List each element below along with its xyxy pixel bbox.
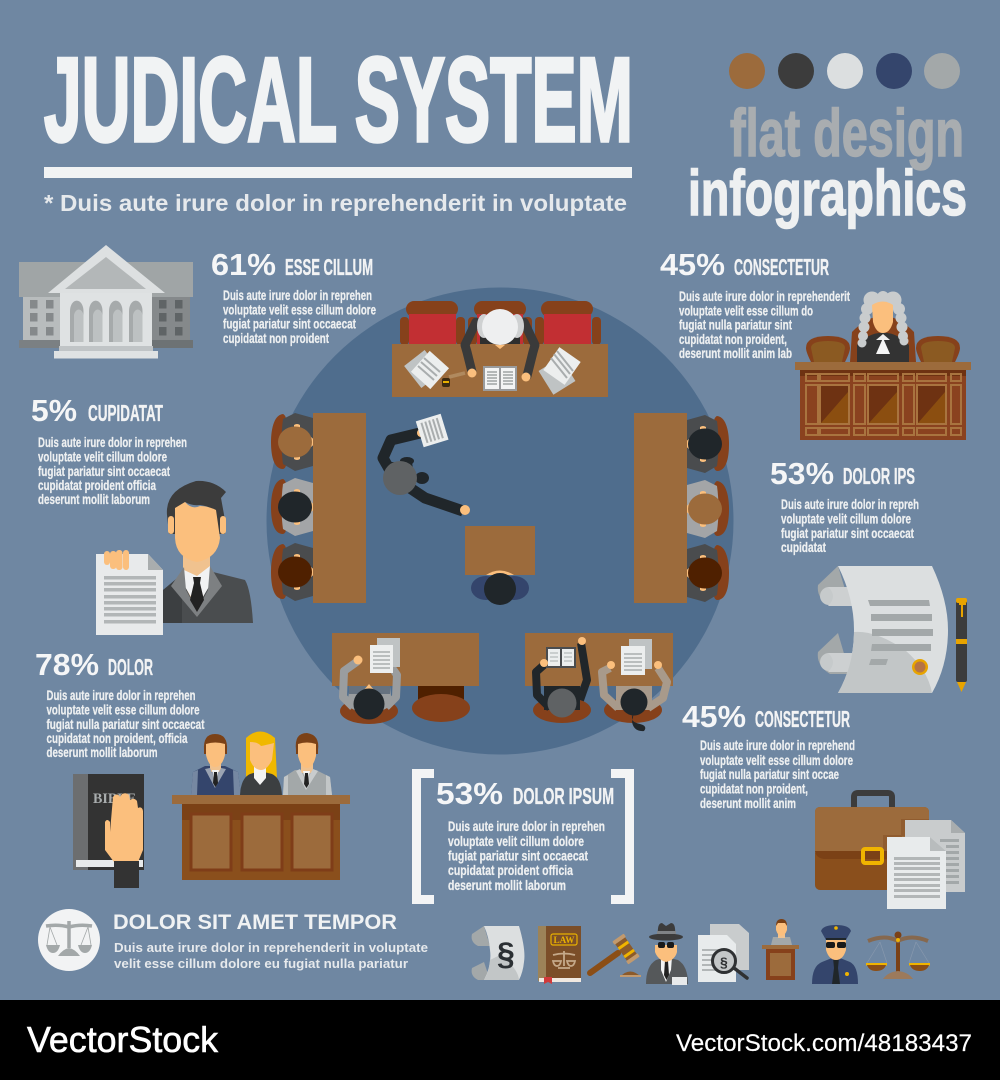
- icon: gavel: [442, 373, 465, 387]
- text block: 61% esse cillum: Duis aute irure dolor in reprehen: [223, 288, 372, 303]
- callout bracket: 53% dolor ipsum: DOLOR IPSUM: [513, 783, 614, 809]
- text block: 78% dolor: voluptate velit esse cillum dolore: [46, 702, 200, 718]
- text block: 61% esse cillum: cupidatat non proident: [223, 331, 329, 346]
- bottom right table with two clerks: [525, 633, 673, 731]
- text block: 53% dolor ips: DOLOR IPS: [843, 463, 915, 489]
- icon: scroll and pen: [818, 566, 967, 693]
- text block: 5% cupidatat: voluptate velit cillum dolore: [38, 449, 167, 464]
- icon: brass scales: [866, 932, 930, 979]
- icon: courthouse: [19, 245, 193, 358]
- text block: 78% dolor: [35, 647, 205, 760]
- text block: 5% cupidatat: deserunt mollit laborum: [38, 492, 150, 507]
- watermark bar: VectorStock: [27, 1019, 219, 1060]
- text block: 45% consectetur lower: 45%: [682, 699, 746, 734]
- text block: 45% consectetur: Duis aute irure dolor in reprehenderit: [679, 289, 850, 304]
- text block: 53% dolor ips: [770, 456, 919, 555]
- footer text: velit esse cillum dolore eu fugiat nulla pariatur: [114, 956, 408, 971]
- text block: 53% dolor ips: cupidatat: [781, 540, 826, 555]
- text block: 45% consectetur: CONSECTETUR: [734, 254, 829, 280]
- text block: 45% consectetur lower: Duis aute irure dolor in reprehend: [700, 738, 855, 753]
- bottom left table with clerk: [332, 633, 479, 724]
- icon: podium speaker: [762, 919, 799, 980]
- text block: 45% consectetur: 45%: [660, 247, 725, 282]
- text block: 5% cupidatat: fugiat pariatur sint occaecat: [38, 464, 170, 479]
- text block: 45% consectetur: cupidatat non proident,: [679, 332, 787, 347]
- text block: 61% esse cillum: 61%: [211, 247, 276, 282]
- text block: 5% cupidatat: 5%: [31, 393, 77, 428]
- judge's desk: [392, 301, 608, 397]
- callout bracket: 53% dolor ipsum: 53%: [436, 776, 503, 811]
- icon: magnified document: [698, 924, 749, 982]
- text block: 5% cupidatat: CUPIDATAT: [88, 400, 163, 426]
- text block: 45% consectetur lower: deserunt mollit anim: [700, 796, 796, 811]
- icon: section scroll: [472, 926, 524, 980]
- text block: 45% consectetur lower: cupidatat non proident,: [700, 782, 808, 796]
- callout bracket: 53% dolor ipsum: cupidatat proident officia: [448, 863, 573, 878]
- text block: 61% esse cillum: fugiat pariatur sint occaecat: [223, 317, 356, 332]
- icon: detective: [646, 923, 688, 985]
- colour palette: [729, 53, 960, 89]
- callout bracket: 53% dolor ipsum: voluptate velit cillum dolore: [448, 834, 584, 849]
- watermark bar: [0, 1000, 1000, 1080]
- icon: magnified document: §: [720, 954, 728, 970]
- footer text: [114, 940, 428, 971]
- text block: 78% dolor: fugiat nulla pariatur sint occaecat: [46, 717, 205, 732]
- text block: 53% dolor ips: 53%: [770, 456, 834, 491]
- text block: 45% consectetur: [660, 247, 850, 361]
- callout bracket: 53% dolor ipsum: deserunt mollit laborum: [448, 878, 566, 893]
- footer heading: DOLOR SIT AMET TEMPOR: [113, 911, 397, 934]
- icon: briefcase with documents: [815, 793, 965, 909]
- icon: scales badge: [38, 909, 100, 971]
- papers right: [539, 347, 581, 395]
- icon: law book: LAW: [554, 935, 574, 945]
- text block: 61% esse cillum: voluptate velit esse cillum dolore: [223, 302, 376, 317]
- icon: hand on bible: BIBLE: [93, 791, 136, 807]
- text block: 45% consectetur lower: [682, 699, 855, 811]
- text block: 45% consectetur lower: voluptate velit esse cillum dolore: [700, 753, 853, 768]
- text block: 78% dolor: deserunt mollit laborum: [46, 745, 158, 760]
- right table with people: [634, 413, 729, 603]
- callout bracket: 53% dolor ipsum: fugiat pariatur sint occaecat: [448, 848, 588, 864]
- papers left: [404, 350, 449, 389]
- icon: gavel: [590, 934, 641, 977]
- text block: 61% esse cillum: ESSE CILLUM: [285, 254, 373, 280]
- icon: law book: [538, 926, 581, 984]
- icon: judge at bench: [795, 291, 971, 440]
- standing lawyer: [383, 414, 470, 515]
- icon: hand on bible: [73, 774, 144, 888]
- text block: 53% dolor ips: voluptate velit cillum dolore: [781, 512, 911, 527]
- panel: courtroom floor plan: [266, 288, 734, 754]
- callout bracket: 53% dolor ipsum: Duis aute irure dolor in reprehen: [448, 819, 605, 834]
- icon: police officer: [812, 925, 858, 984]
- defendant at centre table: [465, 526, 535, 605]
- callout bracket: 53% dolor ipsum: [412, 769, 634, 904]
- text block: 45% consectetur: fugiat nulla pariatur sint: [679, 318, 792, 333]
- icon: lawyer with document: [96, 481, 253, 635]
- text block: 78% dolor: Duis aute irure dolor in reprehen: [46, 688, 196, 703]
- text block: 45% consectetur: deserunt mollit anim lab: [679, 346, 792, 361]
- watermark bar: VectorStock.com/48183437: [676, 1030, 972, 1057]
- text block: 5% cupidatat: Duis aute irure dolor in reprehen: [38, 435, 187, 450]
- icon: section scroll: §: [497, 936, 515, 972]
- text block: 61% esse cillum: [211, 247, 376, 346]
- text block: 5% cupidatat: cupidatat proident officia: [38, 478, 156, 493]
- text block: 78% dolor: DOLOR: [108, 654, 153, 680]
- icon: jury box: [172, 732, 350, 880]
- text block: 78% dolor: 78%: [35, 647, 99, 682]
- footer text: Duis aute irure dolor in reprehenderit in voluptate: [114, 940, 428, 955]
- left table with people: [271, 413, 366, 603]
- text block: 53% dolor ips: fugiat pariatur sint occaecat: [781, 526, 914, 541]
- text block: 5% cupidatat: [31, 393, 187, 507]
- text block: 45% consectetur lower: CONSECTETUR: [755, 706, 850, 732]
- text block: 45% consectetur lower: fugiat nulla pariatur sint occae: [700, 767, 839, 782]
- subtitle: * Duis aute irure dolor in reprehenderit in voluptate: [44, 190, 627, 216]
- text block: 45% consectetur: voluptate velit esse cillum do: [679, 303, 813, 318]
- text block: 78% dolor: cupidatat non proident, officia: [46, 731, 188, 746]
- text block: 53% dolor ips: Duis aute irure dolor in repreh: [781, 497, 919, 512]
